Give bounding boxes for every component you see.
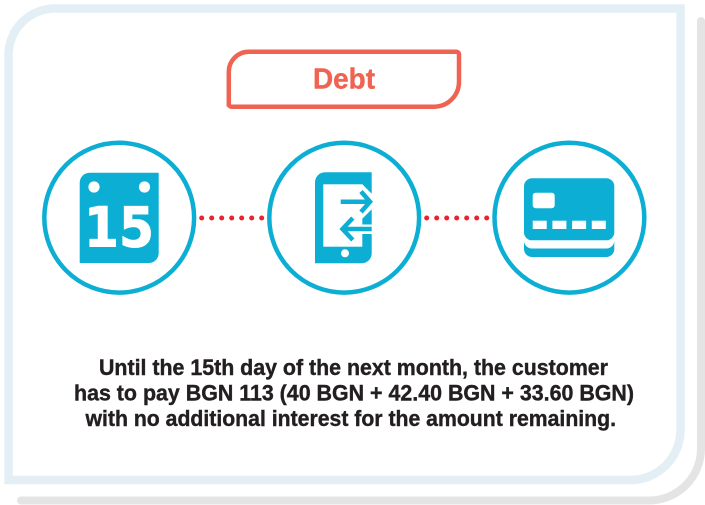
- icon: phone with transfer arrows: [269, 143, 419, 293]
- icon: credit card: [495, 143, 644, 293]
- heading badge: Debt: [229, 52, 459, 107]
- description text: has to pay BGN 113 (40 BGN + 42.40 BGN + 33.60 BGN): [74, 380, 634, 406]
- description text: [74, 355, 634, 431]
- dotted connector left: [199, 216, 264, 220]
- icon: calendar 15: [44, 143, 194, 293]
- dotted connector right: [424, 216, 489, 220]
- heading badge: Debt: Debt: [313, 64, 375, 96]
- description text: Until the 15th day of the next month, the customer: [99, 355, 608, 380]
- description text: with no additional interest for the amount remaining.: [85, 406, 616, 431]
- icon: calendar 15: 15: [84, 196, 154, 260]
